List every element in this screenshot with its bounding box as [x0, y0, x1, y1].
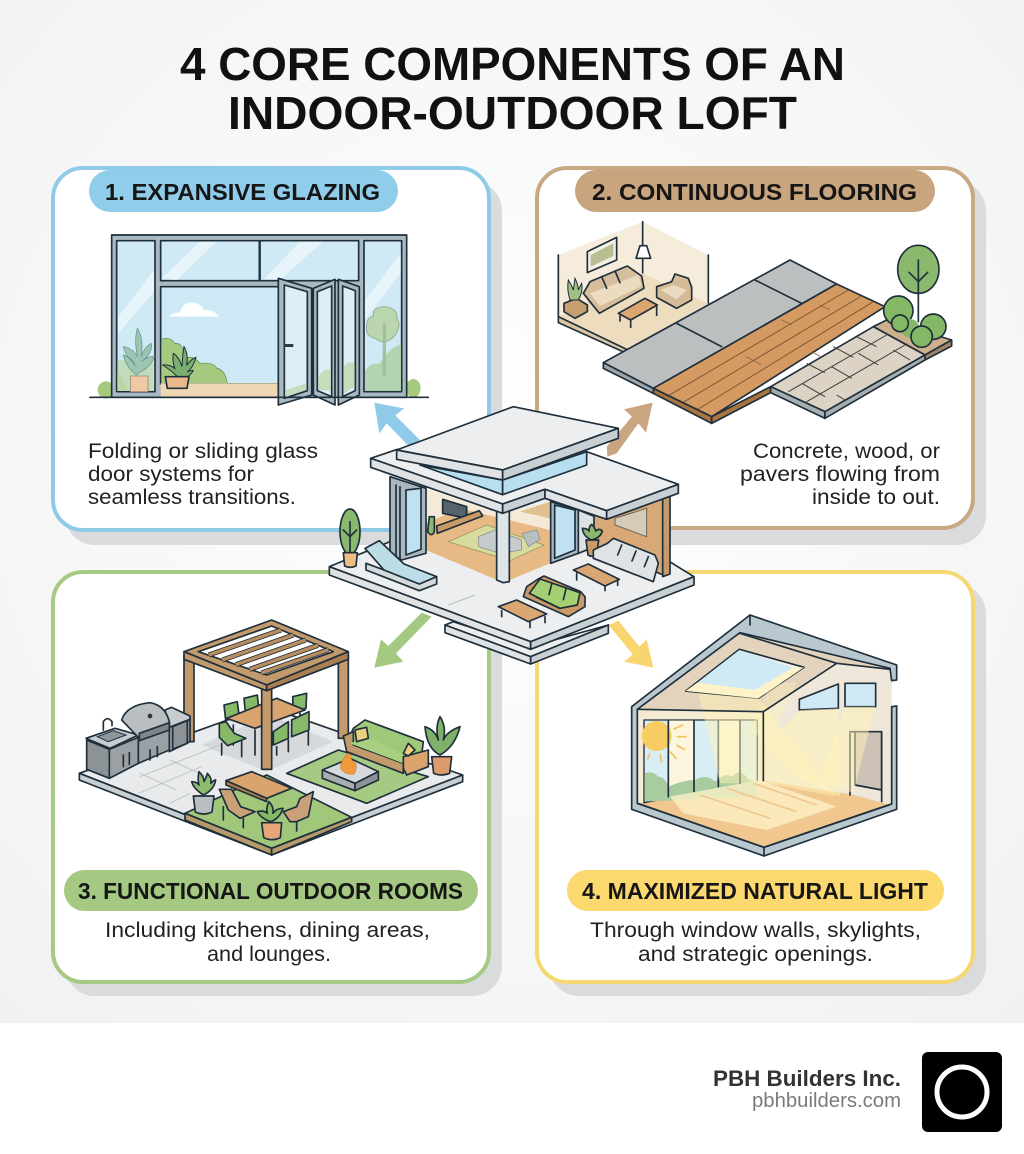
- arrow to glazing: [374, 403, 420, 447]
- green sofa: [343, 720, 428, 775]
- panel: continuous flooring: [537, 168, 986, 545]
- interior room: [426, 488, 550, 583]
- text: continuous flooring description: Concrete, wood, or: [753, 440, 940, 463]
- illustration: folding glass door wall: [90, 235, 428, 405]
- living room sofa: [583, 266, 644, 313]
- text: maximized natural light description: and strategic openings.: [638, 943, 873, 966]
- coffee table: [573, 564, 619, 591]
- arrow to flooring: [607, 403, 653, 457]
- front column: [497, 510, 509, 583]
- right glass door and wood wall: [551, 496, 670, 577]
- skylight: [686, 649, 804, 698]
- upper roof: [397, 407, 618, 480]
- grey sofa: [593, 538, 658, 582]
- logo: [922, 1052, 1002, 1132]
- low table: [498, 600, 547, 628]
- heading: functional outdoor rooms: [64, 870, 478, 911]
- title: 4 CORE COMPONENTS OF AN: [180, 38, 845, 90]
- front step: [445, 622, 608, 664]
- heading: maximized natural light: [567, 870, 944, 911]
- text: expansive glazing description: door systems for: [88, 463, 254, 486]
- arrow to outdoor rooms: [374, 613, 432, 668]
- sun lounger: [365, 541, 437, 591]
- panel: maximized natural light: [537, 572, 986, 996]
- text: expansive glazing description: seamless transitions.: [88, 486, 296, 509]
- clerestory glazing: [420, 452, 587, 495]
- text: expansive glazing description: Folding or sliding glass: [88, 440, 318, 463]
- text: continuous flooring description: pavers flowing from: [740, 463, 940, 486]
- text: functional outdoor rooms description: and lounges.: [207, 943, 331, 966]
- illustration: outdoor kitchen, pergola and lounge: [79, 620, 463, 855]
- illustration: flooring flowing from room to garden: [558, 222, 952, 423]
- outdoor kitchen and grill: [86, 703, 190, 778]
- central loft with arrows: [329, 403, 694, 668]
- title: [180, 38, 845, 139]
- heading: continuous flooring: 2. CONTINUOUS FLOORING: [592, 179, 917, 205]
- clerestory windows: [799, 683, 876, 710]
- window wall with sun: [642, 720, 757, 803]
- light beams: [670, 682, 875, 830]
- planter near sofa: [582, 524, 602, 556]
- text: continuous flooring description: inside to out.: [812, 486, 940, 509]
- pergola roof: [184, 620, 348, 691]
- building shell: [632, 615, 897, 856]
- text: continuous flooring description: [740, 440, 940, 509]
- dining set under pergola: [219, 693, 309, 757]
- glass door stack: [390, 477, 426, 560]
- text: maximized natural light description: Through window walls, skylights,: [590, 919, 921, 942]
- heading: expansive glazing: [89, 170, 398, 212]
- arrow to natural light: [609, 621, 653, 668]
- heading: continuous flooring: [575, 170, 935, 212]
- company website: pbhbuilders.com: [752, 1090, 901, 1112]
- lower roof: [371, 449, 678, 519]
- fire pit: [322, 752, 378, 791]
- heading: expansive glazing: 1. EXPANSIVE GLAZING: [105, 179, 380, 205]
- potted tree: [340, 509, 360, 567]
- potted plants: [192, 717, 460, 814]
- doorway: [855, 732, 882, 790]
- footer: [0, 1023, 1024, 1154]
- platform: [329, 490, 694, 649]
- illustration: room with skylight and window wall: [632, 615, 897, 856]
- wooden dining table: [219, 772, 313, 831]
- text: functional outdoor rooms description: Including kitchens, dining areas,: [105, 919, 430, 942]
- heading: functional outdoor rooms: 3. FUNCTIONAL OUTDOOR ROOMS: [78, 878, 463, 904]
- text: functional outdoor rooms description: [105, 919, 430, 966]
- text: maximized natural light description: [590, 919, 921, 966]
- heading: maximized natural light: 4. MAXIMIZED NATURAL LIGHT: [582, 878, 928, 904]
- company name: PBH Builders Inc.: [713, 1066, 901, 1091]
- title: INDOOR-OUTDOOR LOFT: [228, 87, 797, 139]
- front potted plant: [257, 802, 283, 840]
- panel: functional outdoor rooms: [53, 572, 502, 996]
- panel: expansive glazing: [53, 168, 502, 545]
- text: expansive glazing description: [88, 440, 318, 509]
- green sofa: [523, 576, 585, 617]
